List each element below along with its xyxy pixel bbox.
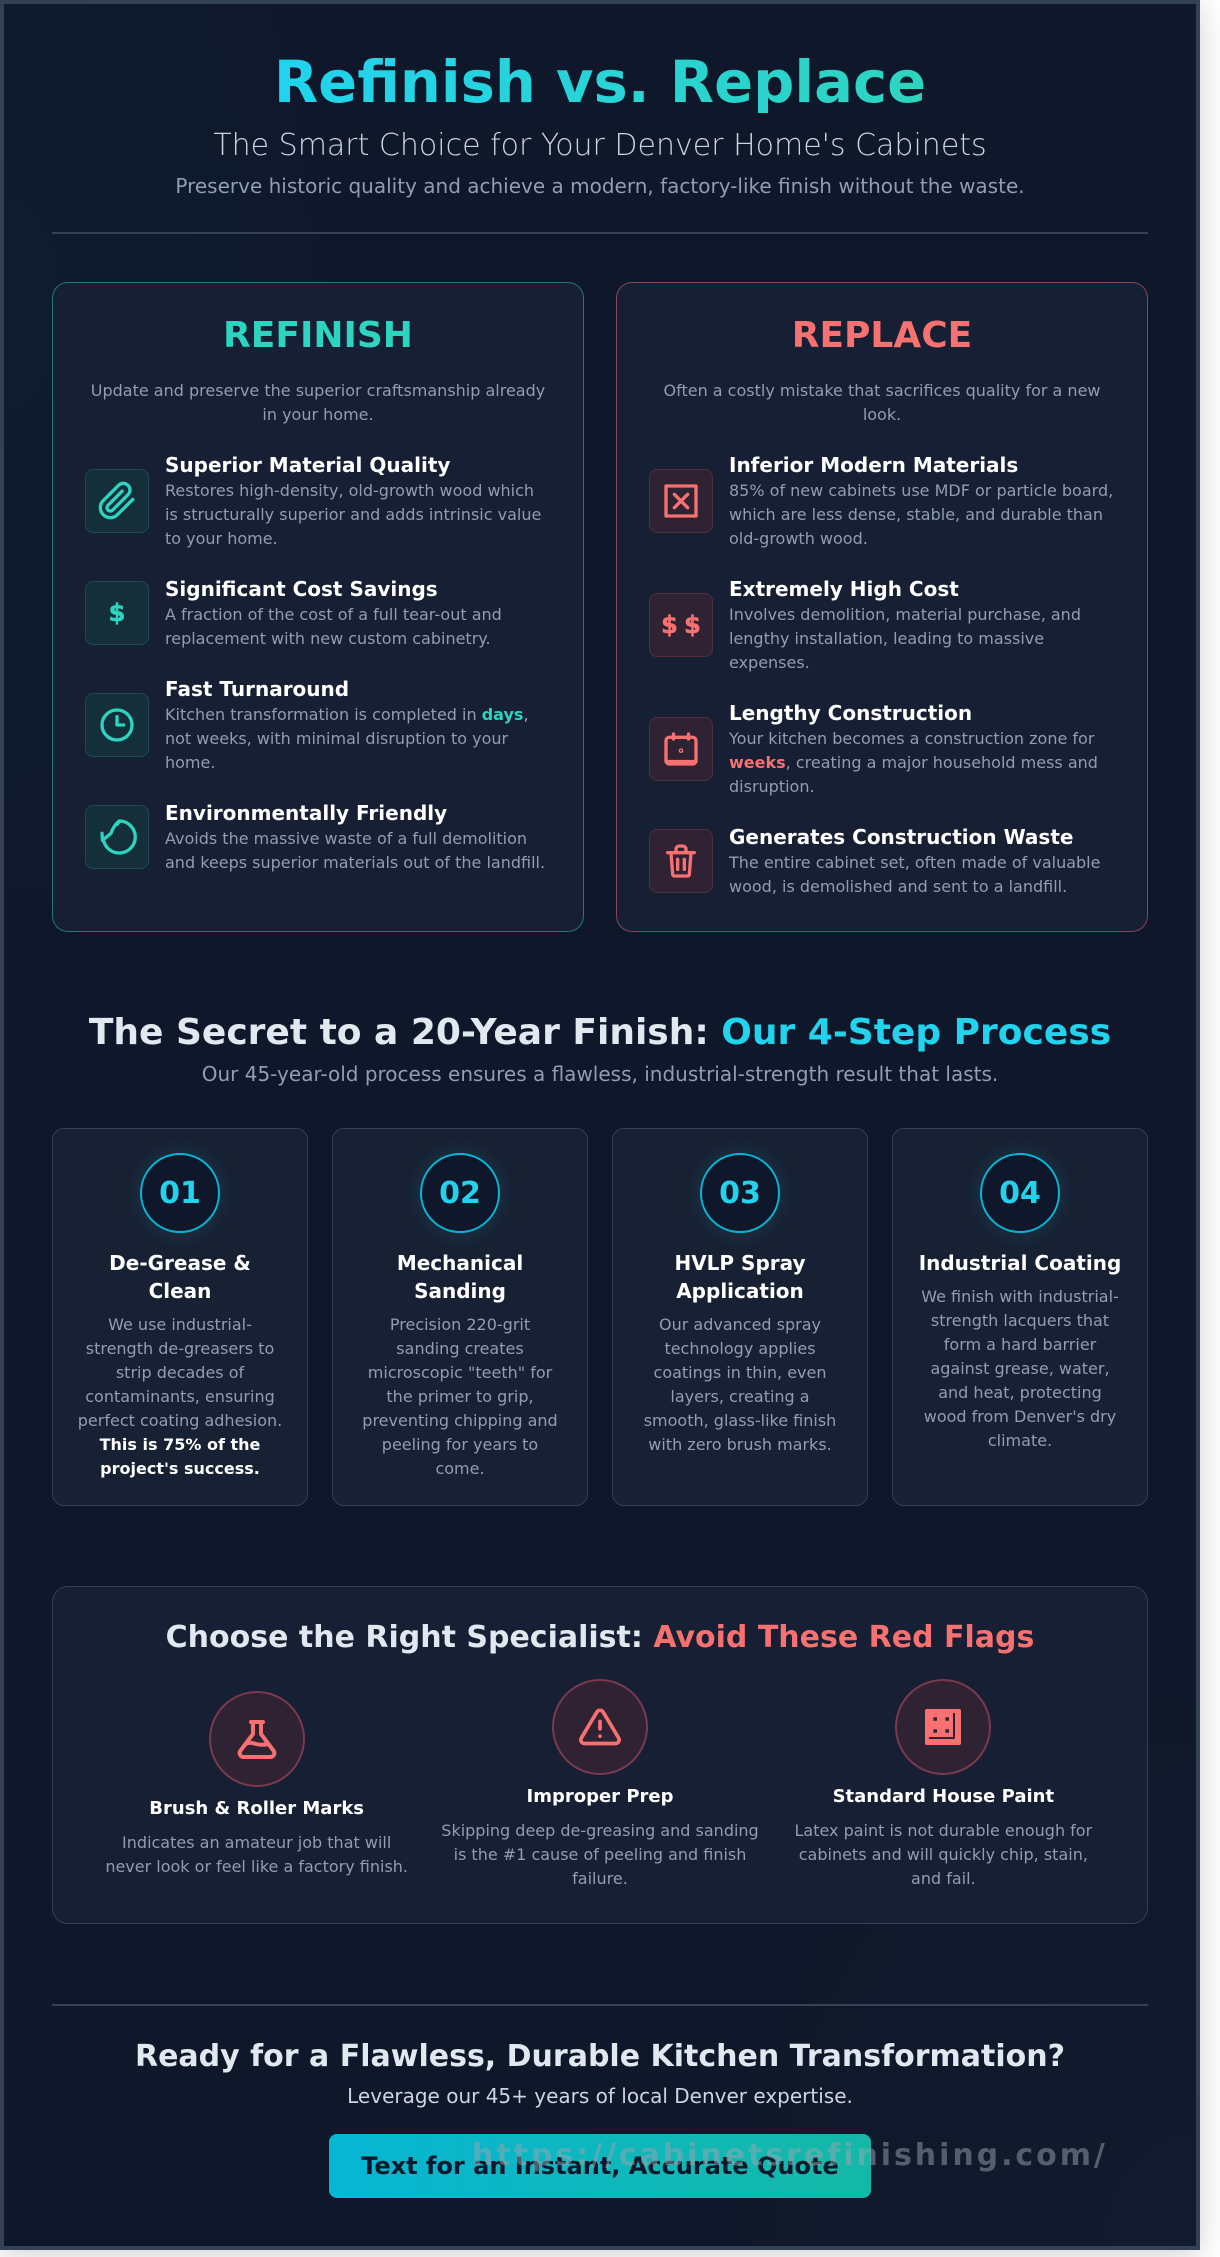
icon: paperclip (85, 469, 149, 533)
flag: improper prep: Skipping deep de-greasing and sanding (441, 1821, 759, 1840)
feature: cost savings (85, 577, 502, 648)
cta text: Leverage our 45+ years of local Denver expertise. (347, 2084, 853, 2108)
icon: warning (552, 1679, 648, 1775)
flag: improper prep (441, 1679, 759, 1888)
feature: construction time: Your kitchen becomes a construction zone for weeks, creating a major household mess and disruption. (729, 729, 1098, 796)
feature: high cost (649, 577, 1081, 672)
feature: turnaround (85, 677, 529, 772)
icon: dollar: $ (109, 599, 125, 627)
icon: paint swatch (895, 1679, 991, 1775)
cta button (329, 2134, 871, 2198)
feature: waste (649, 825, 1100, 896)
process title: The Secret to a 20-Year Finish: Our 4-Step Process (89, 1012, 1111, 1053)
feature: turnaround: Fast Turnaround (165, 677, 349, 701)
icon: calendar (649, 717, 713, 781)
feature: cost savings: Significant Cost Savings (165, 577, 438, 601)
process steps (52, 1128, 1148, 1506)
feature: environment (85, 801, 545, 872)
step 2: Precision 220-grit sanding creates microscopic "teeth" for the primer to grip, preventing chipping and peeling for years to come. (362, 1315, 558, 1478)
refinish intro: Update and preserve the superior craftsmanship already in your home. (91, 381, 545, 424)
feature: waste: The entire cabinet set, often made of valuable wood, is demolished and sent to a landfill. (729, 853, 1100, 896)
number 02: 02 (439, 1176, 481, 1210)
flag: house paint (794, 1679, 1092, 1888)
feature: turnaround: Kitchen transformation is completed in days, not weeks, with minimal disruption to your home. (165, 705, 529, 772)
step 4 (892, 1128, 1148, 1506)
title: Refinish vs. Replace (274, 49, 926, 116)
flag: improper prep: is the #1 cause of peeling and finish (454, 1845, 746, 1864)
step 4: Industrial Coating (919, 1251, 1121, 1275)
feature: inferior materials: 85% of new cabinets use MDF or particle board, which are less dense, stable, and durable than old-growth wood. (729, 481, 1113, 548)
number 03: 03 (719, 1176, 761, 1210)
heading: replace: REPLACE (792, 315, 972, 356)
feature: inferior materials: Inferior Modern Materials (729, 453, 1018, 477)
step 1: We use industrial-strength de-greasers to strip decades of contaminants, ensuring perfect coating adhesion. This is 75% of the project's success. (78, 1315, 282, 1478)
icon: double dollar (649, 593, 713, 657)
header (52, 52, 1148, 234)
step 1 (52, 1128, 308, 1506)
feature: environment: Avoids the massive waste of a full demolition and keeps superior materials out of the landfill. (165, 829, 545, 872)
feature: material quality: Restores high-density, old-growth wood which is structurally superior and adds intrinsic value to your home. (165, 481, 541, 548)
number 01 (140, 1153, 220, 1233)
panel: red flags (52, 1586, 1148, 1924)
heading: refinish: REFINISH (223, 315, 413, 356)
feature: material quality: Superior Material Quality (165, 453, 450, 477)
icon: dollar (85, 581, 149, 645)
comparison panels (52, 282, 1148, 932)
feature: construction time (649, 701, 1098, 796)
number 04 (980, 1153, 1060, 1233)
step 2: Mechanical Sanding (397, 1251, 523, 1303)
flag: brush marks: never look or feel like a factory finish. (105, 1857, 408, 1876)
flag: house paint: Latex paint is not durable enough for (794, 1821, 1092, 1840)
icon: recycle (85, 805, 149, 869)
icon: double dollar: $ $ (661, 611, 701, 639)
step 2 (332, 1128, 588, 1506)
flag: brush marks (105, 1691, 408, 1876)
process subtitle: Our 45-year-old process ensures a flawless, industrial-strength result that lasts. (202, 1062, 998, 1086)
call to action (52, 2004, 1148, 2198)
number 02 (420, 1153, 500, 1233)
number 03 (700, 1153, 780, 1233)
flag: house paint: Standard House Paint (833, 1786, 1054, 1807)
number 04: 04 (999, 1176, 1041, 1210)
step 1: De-Grease & Clean (109, 1251, 251, 1303)
subtitle: The Smart Choice for Your Denver Home's Cabinets (213, 128, 987, 163)
step 3: Our advanced spray technology applies coatings in thin, even layers, creating a smooth, glass-like finish with zero brush marks. (644, 1315, 836, 1454)
icon: x box (649, 469, 713, 533)
panel: refinish (52, 282, 584, 932)
feature: high cost: Involves demolition, material purchase, and lengthy installation, leading to massive expenses. (729, 605, 1081, 672)
feature: material quality (85, 453, 541, 548)
cta heading: Ready for a Flawless, Durable Kitchen Transformation? (135, 2039, 1065, 2074)
lead text: Preserve historic quality and achieve a modern, factory-like finish without the waste. (175, 174, 1025, 198)
step 3 (612, 1128, 868, 1506)
feature: environment: Environmentally Friendly (165, 801, 447, 825)
flag: improper prep: Improper Prep (526, 1786, 673, 1807)
watermark url: https://cabinetsrefinishing.com/ (472, 2138, 1108, 2173)
flag: house paint: cabinets and will quickly chip, stain, (799, 1845, 1088, 1864)
step 3: HVLP Spray Application (674, 1251, 806, 1303)
feature: waste: Generates Construction Waste (729, 825, 1073, 849)
flag: brush marks: Brush & Roller Marks (149, 1798, 364, 1819)
flag: house paint: and fail. (911, 1869, 976, 1888)
feature: cost savings: A fraction of the cost of a full tear-out and replacement with new custom cabinetry. (165, 605, 502, 648)
feature: inferior materials (649, 453, 1113, 548)
section heading: process (89, 1012, 1111, 1086)
cta button: Text for an Instant, Accurate Quote (361, 2152, 839, 2180)
red flags heading: Choose the Right Specialist: Avoid These Red Flags (166, 1620, 1034, 1655)
red flag items (105, 1679, 1092, 1888)
panel: replace (616, 282, 1148, 932)
icon: trash (649, 829, 713, 893)
number 01: 01 (159, 1176, 201, 1210)
icon: flask (209, 1691, 305, 1787)
step 4: We finish with industrial-strength lacquers that form a hard barrier against grease, water, and heat, protecting wood from Denver's dry climate. (921, 1287, 1119, 1450)
feature: high cost: Extremely High Cost (729, 577, 959, 601)
flag: brush marks: Indicates an amateur job that will (122, 1833, 391, 1852)
replace intro: Often a costly mistake that sacrifices quality for a new look. (664, 381, 1100, 424)
icon: clock (85, 693, 149, 757)
flag: improper prep: failure. (572, 1869, 628, 1888)
feature: construction time: Lengthy Construction (729, 701, 972, 725)
